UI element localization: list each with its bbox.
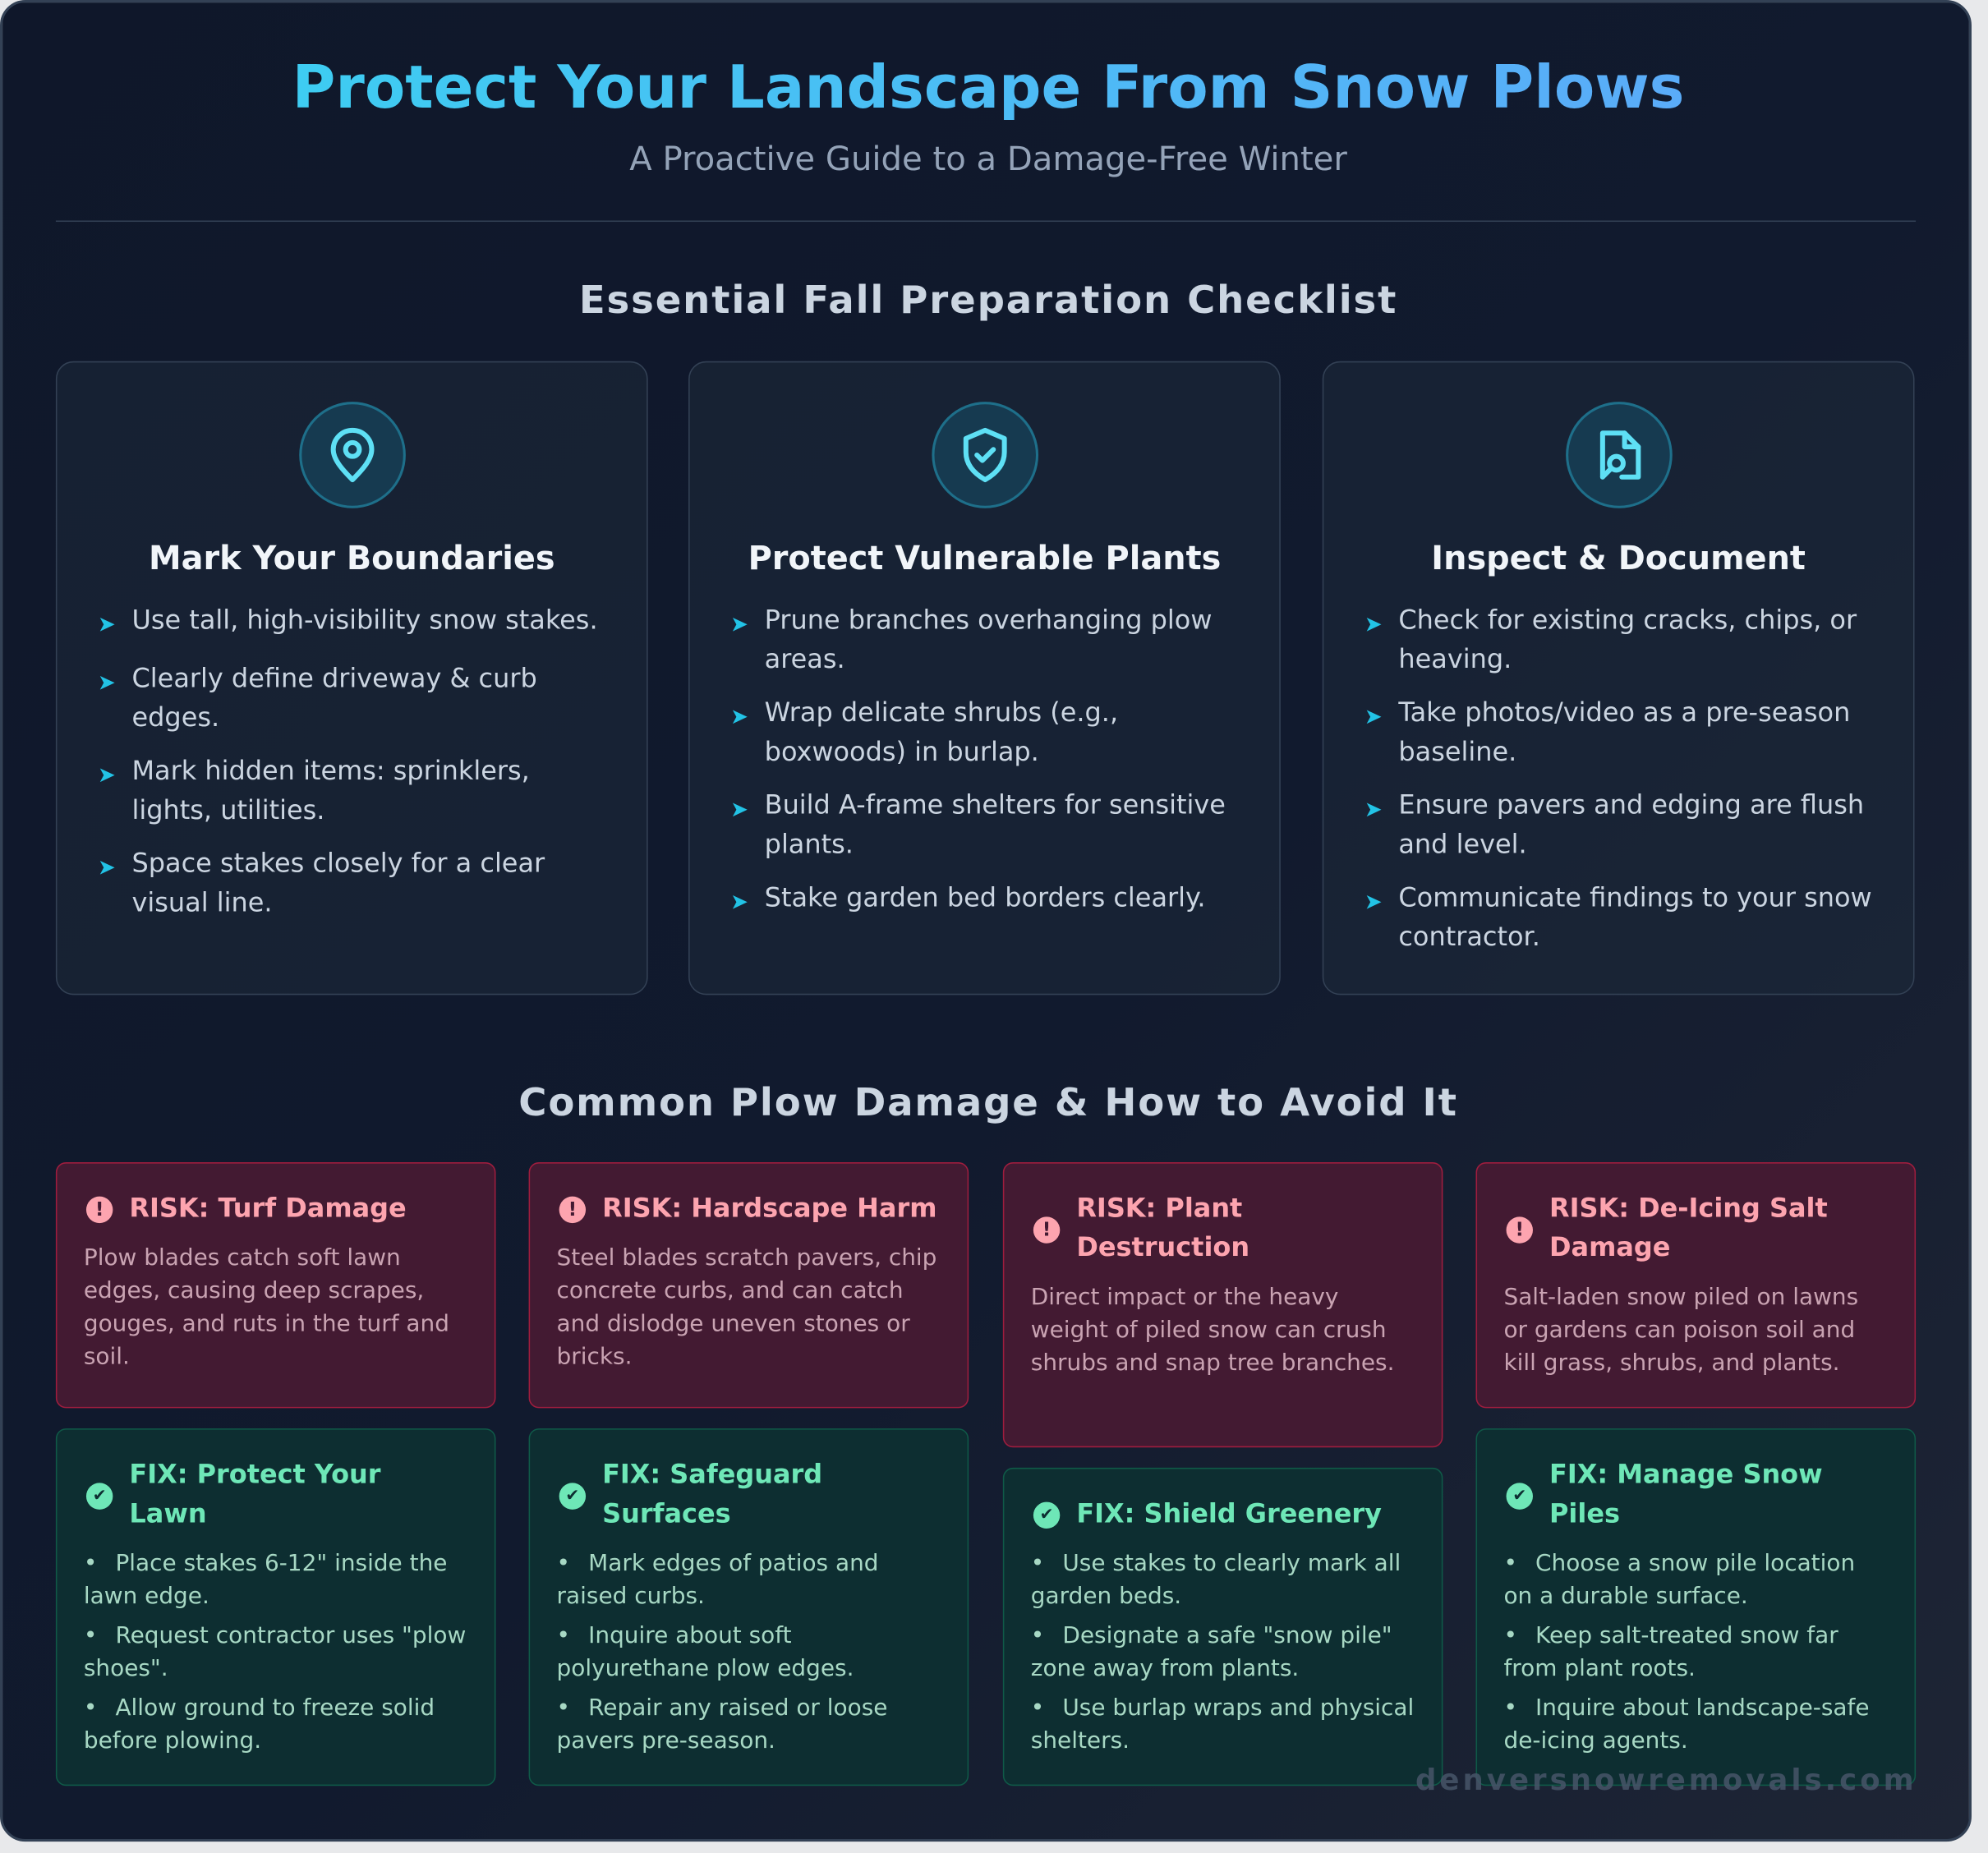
risk: plants [1003,1162,1443,1447]
risk: plants: ! [1042,1218,1051,1241]
risk: plants: RISK: Plant Destruction [1076,1193,1249,1262]
watermark: denversnowremovals.com [1415,1764,1917,1797]
risk: turf: ! [95,1198,104,1221]
panel: protect plants [688,361,1281,995]
fix: greenery [1003,1468,1443,1786]
risk: turf [56,1162,495,1408]
fix: greenery: ✔ [1040,1506,1053,1524]
fix: lawn: FIX: Protect Your Lawn [129,1459,381,1529]
fix: lawn: Allow ground to freeze solid before plowing. [84,1694,435,1754]
title [2,48,1974,126]
fix: snow piles: FIX: Manage Snow Piles [1549,1459,1823,1529]
risk: salt [1476,1162,1916,1408]
heading: damage: Common Plow Damage & How to Avoid It [518,1081,1458,1125]
fix: surfaces [529,1428,969,1786]
list: Space stakes closely for a clear visual line. [132,848,545,917]
fix: snow piles [1476,1428,1916,1786]
fix: lawn: • [84,1550,97,1577]
fix: greenery: • [1031,1622,1044,1649]
heading: checklist: Essential Fall Preparation Checklist [579,278,1397,323]
risk: turf: Plow blades catch soft lawn edges, causing deep scrapes, gouges, and ruts in the turf and soil. [84,1244,449,1370]
panel: inspect [1323,361,1915,995]
fix: lawn: • [84,1694,97,1722]
list: Take photos/video as a pre-season baseline. [1398,697,1850,767]
list: Communicate findings to your snow contractor. [1398,882,1872,952]
fix: surfaces: FIX: Safeguard Surfaces [602,1459,822,1529]
subtitle: A Proactive Guide to a Damage-Free Winter [629,140,1347,179]
risk: salt: ! [1515,1218,1524,1241]
risk: hardscape [529,1162,969,1408]
fix: lawn: • [84,1622,97,1649]
list [100,605,598,917]
risk: hardscape: RISK: Hardscape Harm [602,1193,936,1223]
fix: surfaces: • [557,1550,570,1577]
heading: Mark Your Boundaries [149,540,555,578]
heading: Protect Vulnerable Plants [748,540,1221,578]
icon: document search [1566,402,1673,508]
fix: snow piles: • [1503,1622,1517,1649]
risk: plants: Direct impact or the heavy weight of piled snow can crush shrubs and snap tree branches. [1031,1284,1394,1377]
fix: snow piles: ✔ [1512,1487,1526,1506]
list: Check for existing cracks, chips, or heaving. [1398,605,1857,674]
list: Mark hidden items: sprinklers, lights, utilities. [132,756,530,825]
fix: surfaces: Repair any raised or loose pavers pre-season. [557,1694,887,1754]
list [733,605,1226,913]
fix: surfaces: • [557,1622,570,1649]
fix: snow piles: • [1503,1694,1517,1722]
fix: greenery: FIX: Shield Greenery [1076,1498,1382,1529]
list: Ensure pavers and edging are flush and level. [1398,789,1864,859]
list: Stake garden bed borders clearly. [765,882,1206,913]
list: Build A-frame shelters for sensitive plants. [765,789,1226,859]
risk: salt: RISK: De-Icing Salt Damage [1549,1193,1828,1262]
list: Clearly define driveway & curb edges. [132,663,537,733]
risk: salt: Salt-laden snow piled on lawns or gardens can poison soil and kill grass, shrubs, and plants. [1503,1284,1858,1377]
fix: greenery: Designate a safe "snow pile" zone away from plants. [1031,1622,1392,1682]
fix: greenery: • [1031,1694,1044,1722]
list [1367,605,1872,952]
fix: snow piles: • [1503,1550,1517,1577]
title: Protect Your Landscape From Snow Plows [292,53,1685,122]
panel: mark boundaries [56,361,648,995]
fix: greenery: Use stakes to clearly mark all garden beds. [1031,1550,1401,1610]
fix: snow piles: Inquire about landscape-safe de-icing agents. [1503,1694,1870,1754]
fix: surfaces: Mark edges of patios and raised curbs. [557,1550,879,1610]
risk: turf: RISK: Turf Damage [129,1193,407,1223]
fix: lawn: ✔ [93,1487,107,1506]
icon: map pin [299,402,406,508]
list: Use tall, high-visibility snow stakes. [132,605,598,635]
fix: surfaces: Inquire about soft polyurethane plow edges. [557,1622,854,1682]
fix: lawn: Request contractor uses "plow shoes". [84,1622,466,1682]
fix: surfaces: ✔ [565,1487,579,1506]
list: Wrap delicate shrubs (e.g., boxwoods) in burlap. [765,697,1118,767]
heading: Inspect & Document [1431,540,1806,578]
fix: greenery: • [1031,1550,1044,1577]
list: Prune branches overhanging plow areas. [765,605,1212,674]
fix: surfaces: • [557,1694,570,1722]
fix: greenery: Use burlap wraps and physical shelters. [1031,1694,1414,1754]
icon: shield [932,402,1038,508]
risk: hardscape: Steel blades scratch pavers, chip concrete curbs, and can catch and dislodge uneven stones or bricks. [557,1244,936,1370]
fix: snow piles: Keep salt-treated snow far from plant roots. [1503,1622,1838,1682]
fix: lawn: Place stakes 6-12" inside the lawn edge. [84,1550,447,1610]
fix: snow piles: Choose a snow pile location on a durable surface. [1503,1550,1855,1610]
risk: hardscape: ! [568,1198,577,1221]
fix: lawn [56,1428,495,1786]
